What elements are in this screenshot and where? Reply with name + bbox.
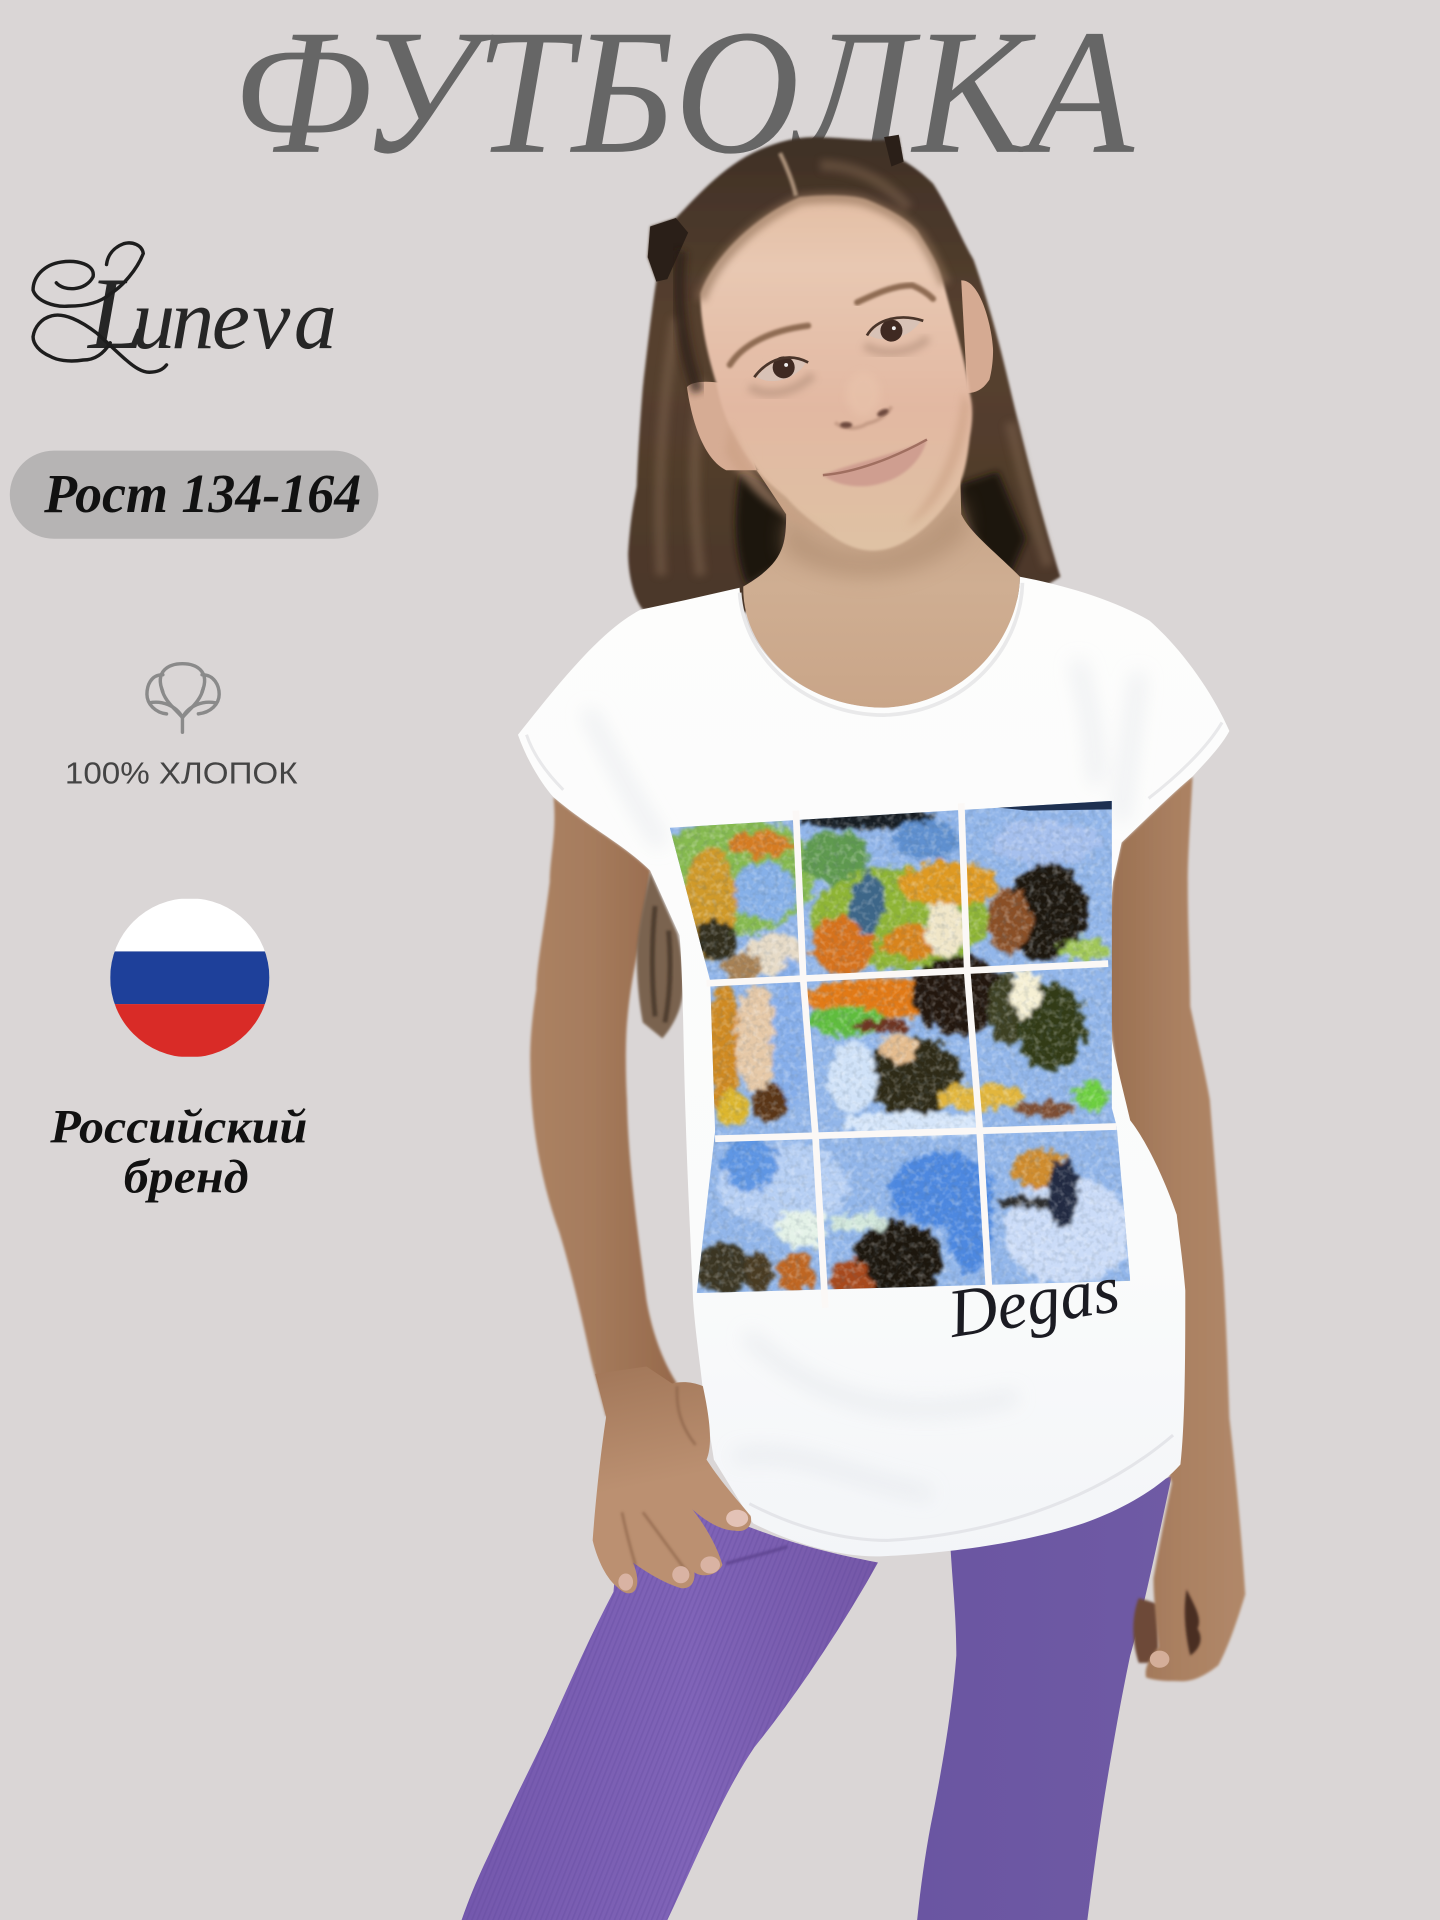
long hair strand [637,872,683,1038]
height badge: Рост 134-164 [43,463,361,524]
head [700,195,972,551]
left arm [530,797,677,1417]
leggings left rib texture [462,1493,878,1920]
icon: russian flag [110,899,269,1057]
brand origin text: бренд [124,1151,249,1204]
brand logo: L [86,257,145,371]
leggings waist fold [726,1547,787,1564]
hair bun top right [884,135,904,167]
back hair [628,137,1060,612]
print signature: Degas [942,1250,1124,1352]
leggings left [462,1493,878,1920]
brand origin text [49,1100,307,1204]
height badge [10,451,378,539]
brand origin text: Российский [49,1100,307,1153]
face shading [725,392,970,534]
left ear [687,382,757,470]
right ear [961,280,993,393]
right hand finger gap and nail [1150,1589,1201,1668]
chin shadow [784,496,967,578]
printed artwork [654,796,1139,1300]
hair highlights [660,165,1048,576]
soft hairline [700,198,945,300]
lip line [823,440,927,475]
right arm [1108,776,1245,1681]
t-shirt [518,577,1229,1556]
left eyebrow [730,326,808,365]
print texture light [661,796,1139,1298]
print base blue [661,796,1139,1298]
lips [823,440,927,486]
leggings right [917,1476,1172,1920]
right eyebrow [857,285,933,302]
hand on hip [593,1367,751,1593]
print grid lines [707,803,1117,1308]
nose [835,372,891,428]
right eye [864,318,928,352]
hair shadow behind neck [736,471,1026,585]
hair parting highlight [780,153,796,196]
icon: cotton [147,664,219,732]
right hand back fingers [1133,1598,1158,1663]
girl figure [462,135,1245,1920]
print texture dark [661,796,1139,1298]
sleeve cuff fold [527,722,1222,798]
left eye [749,356,813,393]
print painted blobs [654,807,1131,1300]
shirt soft folds [588,661,1139,1494]
shirt hem stitch [749,1435,1173,1540]
brand logo: uneva [132,272,337,367]
hair dark side band [679,251,698,392]
shirt collar seam [740,583,1022,715]
hair side tuft [648,218,688,282]
neck and chest [743,465,1020,708]
brand logo [33,243,337,372]
print top edge strip [998,800,1112,811]
material label: 100% ХЛОПОК [65,757,298,791]
